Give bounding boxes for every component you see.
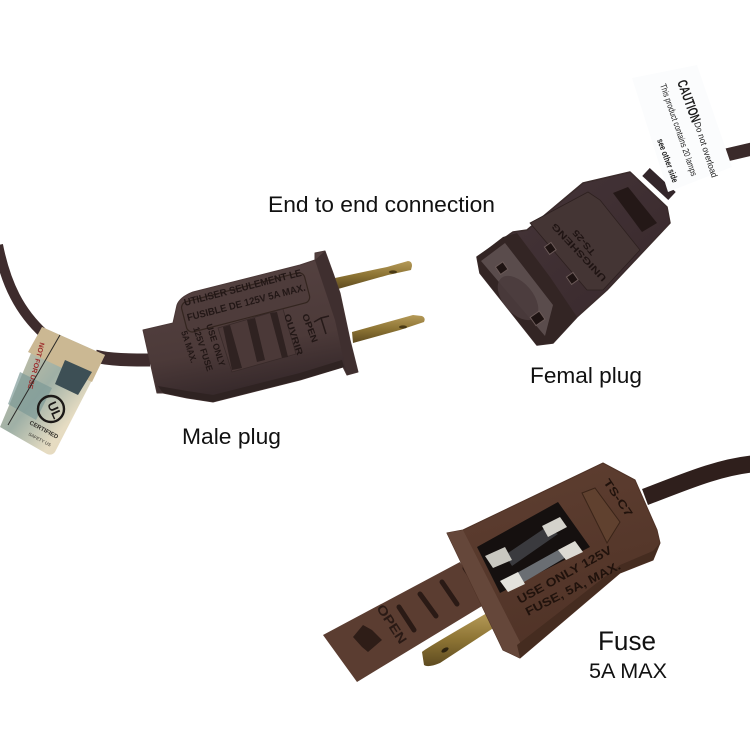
male plug blades [335, 261, 425, 343]
fuse plug pull tab: OPEN [373, 601, 410, 647]
fuse plug assembly [323, 463, 750, 682]
male plug arrow [314, 316, 329, 334]
UL certification tag: UL [44, 399, 65, 421]
male plug embossed text: OUVRIR [282, 313, 305, 357]
caution label: see other side [655, 137, 680, 184]
female plug embossed text [549, 221, 608, 283]
fuse plug cord [645, 464, 750, 497]
male plug embossed text: FUSIBLE DE 125V 5A MAX. [186, 283, 307, 324]
fuse plug blade [422, 613, 495, 666]
caption: fuse: Fuse [598, 626, 656, 656]
male plug embossed text [179, 268, 320, 372]
fuse plug embossed text: USE ONLY 125V [515, 543, 614, 607]
male plug embossed text: 5A MAX. [179, 330, 199, 364]
caution label [632, 65, 732, 192]
caption: male plug: Male plug [182, 424, 281, 449]
caution label: CAUTION [674, 78, 704, 124]
female plug latch [613, 187, 657, 232]
fuse plug body [447, 463, 660, 658]
male plug embossed text: 125V FUSE [191, 326, 215, 372]
UL certification tag: SAFETY US [28, 431, 52, 448]
fuse plug latch [582, 488, 620, 543]
male plug cord [0, 245, 150, 360]
UL certification tag [0, 327, 105, 455]
female plug embossed text: TS-25 [571, 228, 598, 257]
caution label: Do not overload [692, 121, 720, 179]
caption: 5A max: 5A MAX [589, 660, 667, 683]
UL certification tag: NOT FOR USE [26, 341, 45, 390]
fuse plug pull tab [323, 562, 487, 682]
male plug body [143, 251, 358, 402]
caption: female plug: Femal plug [530, 363, 642, 388]
fuse plug embossed text: FUSE, 5A, MAX. [523, 559, 623, 619]
UL certification tag: CERTIFIED [28, 420, 59, 441]
female plug body [477, 172, 670, 345]
female plug sockets [495, 242, 578, 326]
male plug embossed text: UTILISER SEULEMENT LE [183, 268, 303, 309]
female plug cords [646, 149, 750, 196]
male plug slots [218, 309, 296, 372]
fuse compartment [477, 502, 590, 593]
female plug embossed text: UNIGSHENG [549, 221, 608, 283]
fuse plug embossed text: TS-C7 [601, 477, 635, 519]
heading: end to end connection: End to end connection [268, 192, 495, 217]
male plug assembly [0, 245, 425, 455]
fuse plug embossed text [515, 477, 635, 619]
male plug embossed text: USE ONLY [204, 323, 227, 367]
caution label: This product contains 20 lamps [658, 82, 699, 178]
female plug assembly [477, 65, 750, 345]
male plug embossed text: OPEN [300, 312, 320, 344]
